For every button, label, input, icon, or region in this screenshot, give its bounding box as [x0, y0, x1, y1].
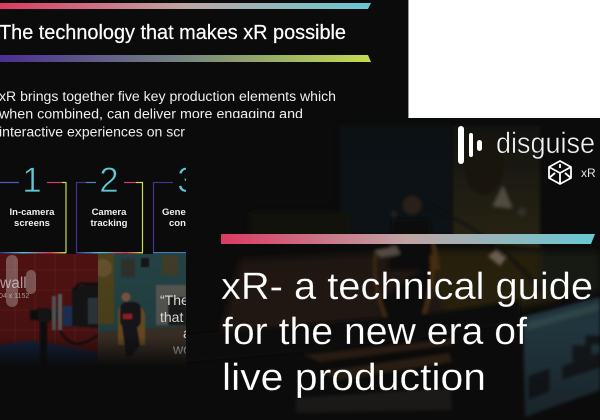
logo: disguise — [458, 126, 595, 164]
quote text (cropped): a — [183, 325, 191, 341]
xR label: xR — [581, 166, 596, 180]
translucent logo marks — [6, 255, 18, 307]
intro text: xR brings together five key production elements which — [0, 89, 336, 104]
intro text: when combined, can deliver more engaging and — [0, 106, 303, 122]
step 3: generative content (cropped) — [152, 168, 186, 254]
step 2: camera tracking: tracking — [91, 218, 128, 229]
step 1: in-camera screens: In-camera — [10, 207, 55, 218]
cover background photo — [221, 128, 600, 417]
cover title: for the new era of — [222, 311, 527, 353]
camera rig — [30, 282, 98, 370]
second gradient bar — [0, 55, 371, 62]
step 2: camera tracking: Camera — [92, 207, 127, 218]
step 2: camera tracking — [76, 161, 143, 254]
step 1: in-camera screens: 1 — [22, 161, 42, 200]
step 3: generative content (cropped): Generative — [162, 207, 211, 218]
top gradient bar — [0, 3, 371, 9]
intro text: interactive experiences on scr — [0, 124, 186, 140]
monitor — [523, 297, 600, 417]
quote text (cropped): “There — [160, 292, 201, 308]
panel: back page — [0, 0, 409, 420]
yellow wall — [453, 125, 540, 248]
cover title: live production — [222, 357, 486, 399]
photo fade overlay — [0, 254, 186, 372]
step 2: camera tracking: 2 — [99, 161, 119, 200]
cover title: xR- a technical guide — [221, 266, 593, 308]
panel: front cover — [186, 117, 600, 420]
back page heading: The technology that makes xR possible — [0, 22, 346, 44]
presenter — [430, 233, 440, 271]
logo mark — [458, 126, 482, 164]
photo: person reading in a room — [98, 254, 186, 360]
step 1: in-camera screens — [0, 161, 66, 254]
step 1: in-camera screens: screens — [14, 218, 50, 229]
floor bands — [222, 300, 521, 336]
photo: LED wall with camera — [0, 254, 98, 370]
step 3: generative content (cropped): content — [169, 218, 204, 229]
icon: xR cube — [549, 161, 571, 184]
wall label: wall — [0, 275, 27, 292]
cover gradient bar — [221, 234, 595, 244]
cover photo dim overlay — [229, 136, 600, 418]
quote text (cropped): world — [172, 341, 206, 357]
quote text (cropped): that — [160, 309, 183, 325]
step 3: generative content (cropped): 3 — [177, 161, 197, 200]
